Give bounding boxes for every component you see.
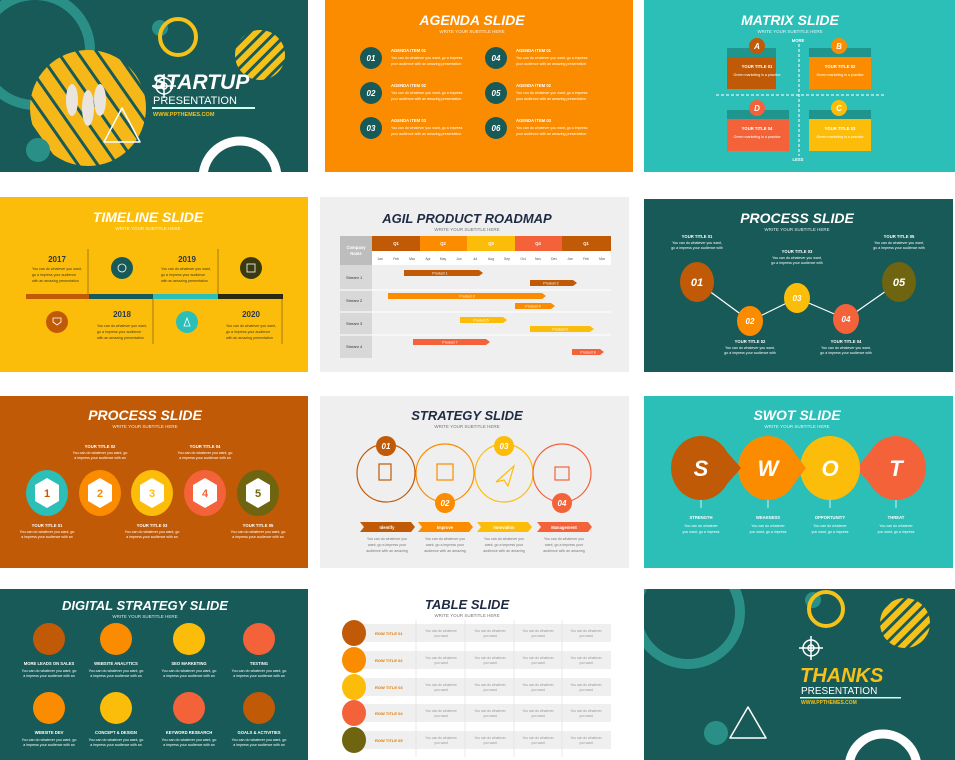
slide: table: you want — [531, 741, 545, 745]
slide: process circles: 05 — [893, 277, 906, 289]
slide: thanks: PRESENTATION — [801, 686, 877, 697]
slide: roadmap: Q3 — [488, 241, 494, 246]
slide: process circles: You can do whatever you want, — [772, 256, 822, 260]
slide: roadmap: Stream 4 — [346, 344, 363, 349]
slide: digital strategy: You can do whatever you want, go — [89, 738, 143, 742]
slide: timeline: with an amazing presentation — [161, 279, 208, 283]
slide: roadmap: Dec — [551, 257, 557, 261]
slide: table: You can do whatever — [522, 736, 555, 740]
slide: timeline: TIMELINE SLIDE — [93, 209, 204, 225]
slide: table: TABLE SLIDE — [425, 597, 509, 612]
slide: process circles: 01 — [691, 277, 703, 289]
slide: process circles: YOUR TITLE 03 — [782, 249, 813, 254]
slide: matrix: MATRIX SLIDE — [741, 12, 840, 28]
slide: matrix — [644, 0, 955, 172]
slide: roadmap: Oct — [520, 257, 526, 261]
slide: swot: You can do whatever — [684, 524, 719, 528]
slide: table: you want — [579, 634, 593, 638]
slide: agenda: AGENDA ITEM 03 — [516, 118, 552, 123]
slide: table: ROW TITLE 05 — [375, 738, 403, 743]
slide: process circles: YOUR TITLE 05 — [884, 234, 915, 239]
slide: strategy: WRITE YOUR SUBTITLE HERE — [434, 424, 500, 429]
slide: agenda: your audience with an amazing presentation — [391, 132, 461, 136]
slide: table: ROW TITLE 04 — [375, 711, 403, 716]
slide: timeline: with an amazing presentation — [97, 336, 144, 340]
slide: process circles: 04 — [842, 315, 851, 324]
slide: strategy: You can do whatever you — [367, 537, 407, 541]
slide: thanks — [644, 589, 955, 760]
slide: swot: You can do whatever — [813, 524, 848, 528]
slide: timeline: 2018 — [113, 310, 131, 319]
slide: timeline: WRITE YOUR SUBTITLE HERE — [115, 226, 181, 231]
slide: strategy: STRATEGY SLIDE — [411, 408, 523, 423]
slide: strategy: want, go a impress your — [426, 543, 465, 547]
slide: matrix: YOUR TITLE 03 — [825, 126, 856, 131]
slide: table: You can do whatever — [570, 656, 603, 660]
slide: table: you want — [434, 661, 448, 665]
slide: digital strategy: a impress your audience with an — [163, 743, 215, 747]
slide: table: You can do whatever — [522, 629, 555, 633]
slide: swot: WEAKNESS — [756, 515, 780, 520]
slide: swot: S — [694, 456, 709, 481]
slide: table: you want — [483, 634, 497, 638]
slide: table: You can do whatever — [425, 683, 458, 687]
slide: agenda: AGENDA ITEM 03 — [391, 118, 427, 123]
slide: timeline: 2019 — [178, 255, 196, 264]
slide: digital strategy: a impress your audience with an — [23, 674, 75, 678]
title: startup: STARTUP — [152, 71, 250, 94]
slide: process hexagons: 3 — [149, 488, 155, 500]
slide: process hexagons: WRITE YOUR SUBTITLE HERE — [112, 424, 178, 429]
slide: matrix: YOUR TITLE 01 — [742, 64, 773, 69]
slide: digital strategy: SEO MARKETING — [171, 661, 207, 666]
slide: matrix: Green marketing is a practice — [817, 135, 863, 139]
slide: strategy: 01 — [382, 442, 391, 451]
slide: startup presentation — [0, 0, 308, 172]
slide: startup presentation: PRESENTATION — [153, 95, 237, 107]
slide: strategy: Improve — [437, 525, 454, 530]
slide: process circles: go a impress your audience with — [820, 351, 872, 355]
slide: roadmap: Mar — [409, 257, 416, 261]
slide: roadmap: May — [440, 257, 447, 261]
slide: agenda: your audience with an amazing presentation — [516, 132, 586, 136]
slide: swot: you want, go a impress — [683, 530, 720, 534]
slide: roadmap: Name — [350, 251, 362, 256]
slide: roadmap: Q4 — [535, 241, 541, 246]
slide: process hexagons: 2 — [97, 488, 103, 500]
slide: timeline: with an amazing presentation — [226, 336, 273, 340]
slide: digital strategy: a impress your audience with an — [233, 743, 285, 747]
slide: table: you want — [579, 661, 593, 665]
slide: matrix: A — [753, 42, 760, 51]
slide: thanks: THANKS — [800, 665, 884, 687]
slide: process hexagons: 4 — [202, 488, 209, 500]
slide: table: You can do whatever — [522, 656, 555, 660]
slide: table: you want — [434, 688, 448, 692]
slide: table: ROW TITLE 02 — [375, 658, 403, 663]
slide: process hexagons: 5 — [255, 488, 261, 500]
slide: digital strategy: You can do whatever you want, go — [89, 669, 143, 673]
slide: matrix: B — [836, 42, 842, 51]
slide: swot: T — [889, 456, 904, 481]
slide: timeline: You can do whatever you want, — [226, 324, 276, 328]
slide: timeline: You can do whatever you want, — [32, 267, 82, 271]
slide: matrix: MORE — [792, 38, 804, 43]
slide: timeline: You can do whatever you want, — [97, 324, 147, 328]
slide: matrix: Green marketing is a practice — [734, 73, 780, 77]
slide: process circles — [644, 199, 953, 372]
slide: roadmap: Jan — [377, 257, 383, 261]
slide: swot: you want, go a impress — [750, 530, 787, 534]
slide: process circles: You can do whatever you want, — [821, 346, 871, 350]
slide: strategy: 03 — [500, 442, 509, 451]
slide: strategy: You can do whatever you — [544, 537, 584, 541]
slide: digital strategy: You can do whatever you want, go — [22, 669, 76, 673]
slide: process circles: YOUR TITLE 04 — [831, 339, 862, 344]
slide: table: you want — [434, 741, 448, 745]
slide: roadmap: Mar — [599, 257, 606, 261]
slide: roadmap: Sep — [504, 257, 510, 261]
slide: table: You can do whatever — [474, 683, 507, 687]
slide: swot: You can do whatever — [879, 524, 914, 528]
slide: process hexagons: YOUR TITLE 02 — [85, 444, 116, 449]
slide: roadmap: Feb — [393, 257, 399, 261]
slide: agenda: You can do whatever you want, go a impress — [516, 56, 588, 60]
slide: timeline: go a impress your audience — [226, 330, 270, 334]
slide: agenda: AGENDA SLIDE — [418, 12, 525, 28]
slide: roadmap: Stream 2 — [346, 298, 363, 303]
slide: process circles: You can do whatever you want, — [672, 241, 722, 245]
slide: roadmap: Q1 — [393, 241, 399, 246]
slide: roadmap: Product 1 — [432, 272, 448, 276]
slide: digital strategy: WRITE YOUR SUBTITLE HERE — [112, 614, 178, 619]
slide: digital strategy: MORE LEADS ON SALES — [24, 661, 74, 666]
slide: table: you want — [531, 661, 545, 665]
slide: table: you want — [579, 688, 593, 692]
slide: table: ROW TITLE 03 — [375, 685, 403, 690]
slide: roadmap: Q2 — [440, 241, 446, 246]
slide: roadmap: AGIL PRODUCT ROADMAP — [381, 211, 552, 226]
slide: table: you want — [531, 634, 545, 638]
slide: table: You can do whatever — [570, 683, 603, 687]
slide: strategy: want, go a impress your — [545, 543, 584, 547]
slide: matrix: YOUR TITLE 02 — [825, 64, 856, 69]
slide: digital strategy: WEBSITE ANALYTICS — [94, 661, 138, 666]
slide: process hexagons: YOUR TITLE 05 — [243, 523, 274, 528]
slide: table: you want — [434, 634, 448, 638]
slide: timeline: with an amazing presentation — [32, 279, 79, 283]
slide: matrix: LESS — [793, 157, 804, 162]
slide: process hexagons: 1 — [44, 488, 50, 500]
slide: strategy: 04 — [558, 499, 567, 508]
slide: swot: you want, go a impress — [878, 530, 915, 534]
slide: agenda: your audience with an amazing presentation — [391, 97, 461, 101]
slide: agenda: your audience with an amazing presentation — [516, 62, 586, 66]
slide: process hexagons: You can do whatever you want, go — [125, 530, 179, 534]
slide: table: You can do whatever — [474, 629, 507, 633]
slide: agenda: You can do whatever you want, go a impress — [391, 91, 463, 95]
slide: digital strategy: a impress your audience with an — [233, 674, 285, 678]
icon: target — [152, 74, 176, 98]
slide: roadmap: Product 7 — [442, 340, 458, 344]
slide: process hexagons: You can do whatever you want, go — [178, 451, 232, 455]
slide: digital strategy: You can do whatever you want, go — [232, 669, 286, 673]
slide: swot: SWOT SLIDE — [753, 407, 841, 423]
slide: agenda: AGENDA ITEM 01 — [391, 48, 427, 53]
slide: strategy: You can do whatever you — [484, 537, 524, 541]
slide: agenda: AGENDA ITEM 01 — [516, 48, 552, 53]
slide: strategy: 02 — [441, 499, 450, 508]
slide: table: You can do whatever — [425, 736, 458, 740]
slide: table: You can do whatever — [570, 709, 603, 713]
slide: agenda: You can do whatever you want, go a impress — [516, 126, 588, 130]
slide: process hexagons: a impress your audience with an — [21, 535, 73, 539]
slide: swot: you want, go a impress — [812, 530, 849, 534]
slide: strategy: audience with an amazing — [366, 549, 408, 553]
slide: timeline: go a impress your audience — [161, 273, 205, 277]
slide: table: you want — [434, 714, 448, 718]
slide: swot: W — [758, 456, 781, 481]
slide: roadmap: Jun — [456, 257, 462, 261]
slide: digital strategy: DIGITAL STRATEGY SLIDE — [62, 598, 228, 613]
slide: process circles: YOUR TITLE 01 — [682, 234, 713, 239]
photo circle — [30, 50, 146, 166]
slide: table: You can do whatever — [425, 709, 458, 713]
slide: process hexagons: a impress your audience with an — [74, 456, 126, 460]
slide: swot: You can do whatever — [751, 524, 786, 528]
slide: digital strategy: You can do whatever you want, go — [22, 738, 76, 742]
slide: roadmap: Aug — [488, 257, 494, 261]
slide: process hexagons: You can do whatever you want, go — [73, 451, 127, 455]
slide: process hexagons: PROCESS SLIDE — [88, 407, 202, 423]
slide: roadmap: WRITE YOUR SUBTITLE HERE — [434, 227, 500, 232]
slide: strategy: audience with an amazing — [424, 549, 466, 553]
slide: table: WRITE YOUR SUBTITLE HERE — [434, 613, 500, 618]
slide: roadmap: Product 5 — [473, 318, 489, 322]
slide: thanks: WWW.PPTHEMES.COM — [801, 700, 857, 706]
slide: strategy: want, go a impress your — [368, 543, 407, 547]
slide: roadmap: Product 2 — [543, 282, 559, 286]
slide: timeline: 2017 — [48, 255, 66, 264]
slide: timeline — [0, 197, 308, 372]
slide: agenda: your audience with an amazing presentation — [516, 97, 586, 101]
slide: timeline: go a impress your audience — [97, 330, 141, 334]
slide: table: You can do whatever — [522, 709, 555, 713]
slide: process circles: 03 — [793, 294, 802, 303]
slide: agenda: You can do whatever you want, go a impress — [391, 126, 463, 130]
slide: agenda: your audience with an amazing presentation — [391, 62, 461, 66]
slide: digital strategy: CONCEPT & DESIGN — [95, 730, 137, 735]
slide: table: You can do whatever — [425, 656, 458, 660]
slide: table: ROW TITLE 01 — [375, 631, 403, 636]
slide: roadmap: Product 3 — [459, 294, 475, 298]
slide: swot: OPPORTUNITY — [815, 515, 845, 520]
slide: roadmap: Stream 1 — [346, 275, 363, 280]
slide: swot: THREAT — [888, 515, 905, 520]
slide: table: you want — [531, 714, 545, 718]
slide: roadmap: Jul — [473, 257, 477, 261]
slide: swot — [644, 396, 953, 568]
slide: agenda: You can do whatever you want, go a impress — [391, 56, 463, 60]
slide: table — [320, 589, 633, 760]
slide: agenda: AGENDA ITEM 02 — [391, 83, 427, 88]
slide: agenda: 06 — [492, 124, 501, 133]
slide: digital strategy: You can do whatever you want, go — [162, 738, 216, 742]
slide: timeline: 2020 — [242, 310, 260, 319]
slide: roadmap: Nov — [535, 257, 541, 261]
slide: matrix: Green marketing is a practice — [734, 135, 780, 139]
slide: roadmap: Product 4 — [525, 304, 541, 308]
slide: table: you want — [531, 688, 545, 692]
slide: table: you want — [579, 714, 593, 718]
slide: swot: STRENGTH — [689, 515, 713, 520]
slide: table: you want — [483, 741, 497, 745]
slide: digital strategy: KEYWORD RESEARCH — [166, 730, 212, 735]
slide: roadmap: Product 6 — [552, 328, 568, 332]
slide: process hexagons: a impress your audience with an — [126, 535, 178, 539]
slide: strategy — [320, 396, 629, 568]
slide: process circles: go a impress your audience with — [724, 351, 776, 355]
slide: process hexagons: YOUR TITLE 04 — [190, 444, 221, 449]
slide: process circles: You can do whatever you want, — [725, 346, 775, 350]
slide: table: You can do whatever — [570, 629, 603, 633]
slide: digital strategy: a impress your audience with an — [90, 743, 142, 747]
slide: digital strategy: a impress your audience with an — [23, 743, 75, 747]
slide: matrix: WRITE YOUR SUBTITLE HERE — [757, 29, 823, 34]
slide: strategy: Identify — [380, 525, 395, 530]
slide: agenda: 05 — [492, 89, 501, 98]
slide: roadmap: Jan — [567, 257, 573, 261]
slide: strategy: You can do whatever you — [425, 537, 465, 541]
slide: roadmap: Apr — [425, 257, 432, 261]
slide: startup presentation: WWW.PPTHEMES.COM — [153, 112, 215, 118]
slide: strategy: audience with an amazing — [543, 549, 585, 553]
slide: agenda: WRITE YOUR SUBTITLE HERE — [439, 29, 505, 34]
slide: digital strategy: TESTING — [250, 661, 268, 666]
slide: timeline: You can do whatever you want, — [161, 267, 211, 271]
slide: process circles: WRITE YOUR SUBTITLE HERE — [764, 227, 830, 232]
slide: swot: O — [821, 456, 839, 481]
slide: roadmap: Q1 — [583, 241, 589, 246]
slide: process circles: go a impress your audience with — [873, 246, 925, 250]
slide: table: You can do whatever — [474, 656, 507, 660]
slide: agenda — [325, 0, 633, 172]
slide: strategy: Innovation — [493, 525, 515, 530]
slide: roadmap: Company — [346, 245, 366, 250]
slide: process hexagons — [0, 396, 308, 568]
slide: process hexagons: YOUR TITLE 01 — [32, 523, 63, 528]
slide: swot: WRITE YOUR SUBTITLE HERE — [764, 424, 830, 429]
slide: roadmap — [320, 197, 629, 372]
slide: process circles: YOUR TITLE 02 — [735, 339, 766, 344]
slide: process hexagons: a impress your audience with an — [179, 456, 231, 460]
slide: strategy: audience with an amazing — [483, 549, 525, 553]
slide: table: you want — [579, 741, 593, 745]
slide: digital strategy: a impress your audience with an — [163, 674, 215, 678]
slide: agenda: 02 — [367, 89, 376, 98]
slide: digital strategy — [0, 589, 308, 760]
slide: agenda: 01 — [367, 54, 376, 63]
slide: matrix: Green marketing is a practice — [817, 73, 863, 77]
slide: process circles: go a impress your audience with — [671, 246, 723, 250]
slide: process hexagons: a impress your audience with an — [232, 535, 284, 539]
slide: strategy: Management — [551, 525, 577, 530]
slide: digital strategy: WEBSITE DEV — [35, 730, 64, 735]
slide: agenda: 03 — [367, 124, 376, 133]
slide: digital strategy: You can do whatever you want, go — [162, 669, 216, 673]
slide: process hexagons: YOUR TITLE 03 — [137, 523, 168, 528]
slide: roadmap: Feb — [583, 257, 589, 261]
slide: process circles: 02 — [746, 317, 755, 326]
slide: process circles: PROCESS SLIDE — [740, 210, 854, 226]
slide: table: You can do whatever — [425, 629, 458, 633]
slide: agenda: You can do whatever you want, go a impress — [516, 91, 588, 95]
slide: digital strategy: You can do whatever you want, go — [232, 738, 286, 742]
slide: table: You can do whatever — [570, 736, 603, 740]
slide: process circles: You can do whatever you want, — [874, 241, 924, 245]
slide: process hexagons: You can do whatever you want, go — [231, 530, 285, 534]
slide: matrix: D — [754, 104, 760, 113]
slide: strategy: want, go a impress your — [485, 543, 524, 547]
slide: digital strategy: GOALS & ACTIVITIES — [237, 730, 281, 735]
slide: digital strategy: a impress your audience with an — [90, 674, 142, 678]
slide: table: You can do whatever — [474, 736, 507, 740]
slide: matrix: C — [836, 104, 842, 113]
slide: matrix: YOUR TITLE 04 — [742, 126, 773, 131]
slide: roadmap: Stream 3 — [346, 321, 363, 326]
slide: table: You can do whatever — [474, 709, 507, 713]
slide: table: you want — [483, 661, 497, 665]
slide: roadmap: Product 8 — [580, 350, 596, 354]
slide: agenda: AGENDA ITEM 02 — [516, 83, 552, 88]
slide: agenda: 04 — [492, 54, 501, 63]
slide: table: You can do whatever — [522, 683, 555, 687]
slide: table: you want — [483, 688, 497, 692]
slide: process circles: go a impress your audience with — [771, 261, 823, 265]
slide: table: you want — [483, 714, 497, 718]
slide: timeline: go a impress your audience — [32, 273, 76, 277]
slide: process hexagons: You can do whatever you want, go — [20, 530, 74, 534]
